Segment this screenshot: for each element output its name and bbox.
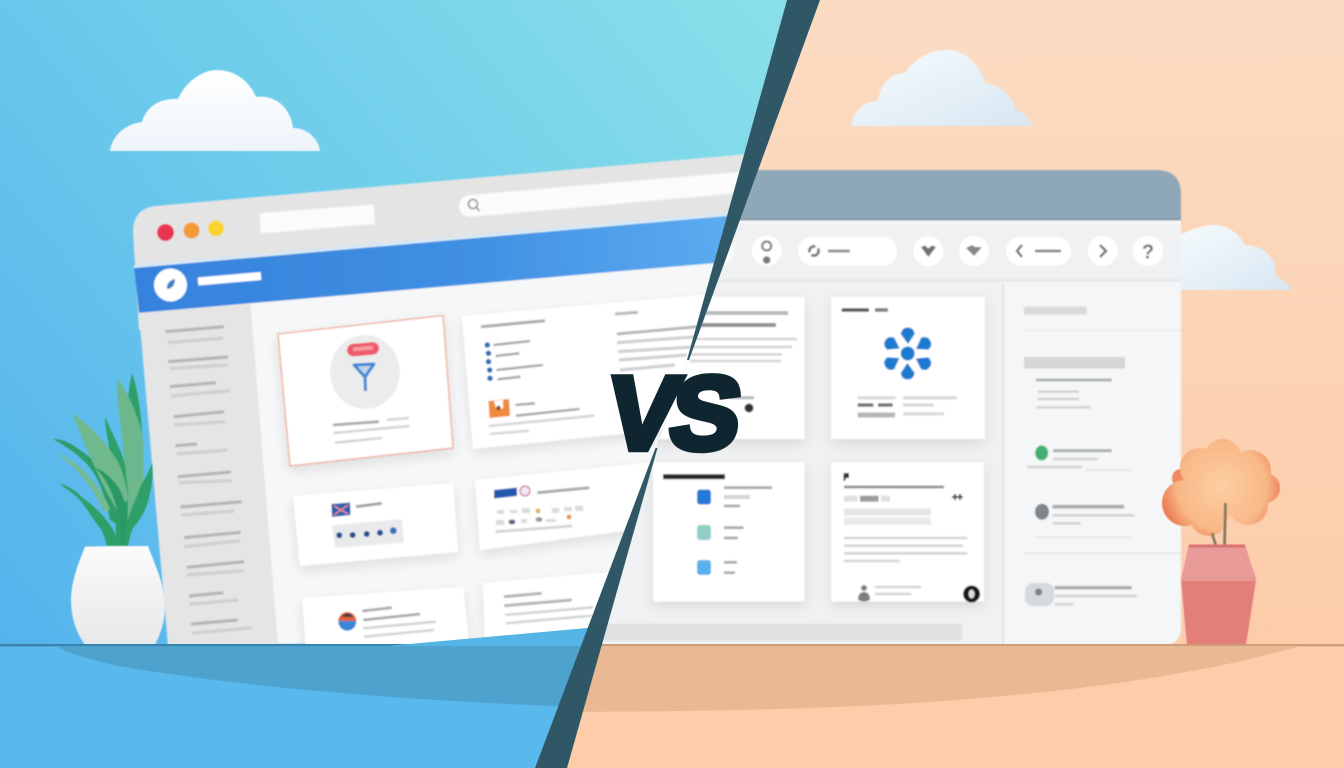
bottom bar bbox=[600, 624, 962, 641]
right browser window bbox=[600, 170, 1181, 645]
address tab bbox=[260, 204, 375, 234]
icon: funnel in circle bbox=[330, 335, 400, 409]
icon: blue flower bbox=[882, 328, 934, 380]
left browser chrome bbox=[133, 153, 760, 330]
left browser window bbox=[133, 153, 760, 650]
right side panel bbox=[1002, 286, 1137, 644]
orange flower bbox=[1162, 439, 1280, 536]
avatar: grey bbox=[1035, 504, 1049, 520]
flower stems bbox=[1212, 503, 1226, 546]
card: globe item bbox=[300, 588, 471, 644]
button: back pill bbox=[1006, 237, 1071, 266]
button: heart bbox=[913, 236, 943, 266]
blue header bar bbox=[134, 211, 750, 313]
card: bullet list with orange icon bbox=[460, 296, 704, 456]
icon: globe bbox=[338, 612, 356, 631]
card: text with dark dot bbox=[640, 297, 804, 439]
icon: person bbox=[858, 585, 870, 602]
card: text snippet bbox=[480, 574, 608, 637]
button: help bbox=[1133, 236, 1163, 266]
avatar: green bbox=[1035, 446, 1048, 460]
button: location pin bbox=[752, 236, 782, 266]
toolbar bbox=[690, 236, 1163, 266]
card: icon tile grid bbox=[475, 462, 655, 550]
button: help: ? bbox=[1142, 242, 1154, 264]
icon: blue badge bbox=[494, 486, 530, 498]
button: badge heart bbox=[959, 236, 989, 266]
avatar: pill bbox=[1025, 583, 1054, 606]
button: refresh pill bbox=[798, 237, 897, 266]
icon: orange square bbox=[488, 399, 510, 418]
card: document with avatar bbox=[831, 462, 984, 602]
left content area bbox=[139, 260, 750, 645]
icon: flag bbox=[332, 502, 350, 517]
center diagonal divider bbox=[535, 0, 820, 768]
right small cloud bbox=[1170, 225, 1292, 290]
VS label: VS bbox=[601, 355, 745, 472]
window control dots bbox=[157, 220, 224, 241]
right browser title bar bbox=[740, 169, 1182, 220]
right browser body bbox=[600, 220, 1181, 645]
right flower plant bbox=[1162, 439, 1280, 645]
left plant bbox=[53, 373, 165, 645]
right top cloud bbox=[851, 50, 1032, 126]
panel: right peach background bbox=[500, 0, 1344, 768]
panel: left blue background bbox=[0, 0, 800, 768]
pink vase bbox=[1181, 544, 1256, 645]
left sidebar bbox=[139, 304, 278, 645]
left floor bbox=[0, 644, 581, 768]
left cloud bbox=[110, 70, 320, 151]
card: blue flower icon bbox=[831, 297, 985, 439]
button: forward bbox=[1088, 236, 1118, 266]
card: flag with dots bbox=[293, 483, 458, 566]
right floor bbox=[500, 644, 1344, 768]
plant leaves bbox=[53, 373, 152, 546]
card: colour squares list bbox=[653, 462, 804, 602]
search bar bbox=[459, 171, 750, 217]
white vase bbox=[71, 546, 165, 645]
icon: black ring bbox=[963, 586, 980, 602]
card: funnel feature bbox=[278, 316, 453, 466]
